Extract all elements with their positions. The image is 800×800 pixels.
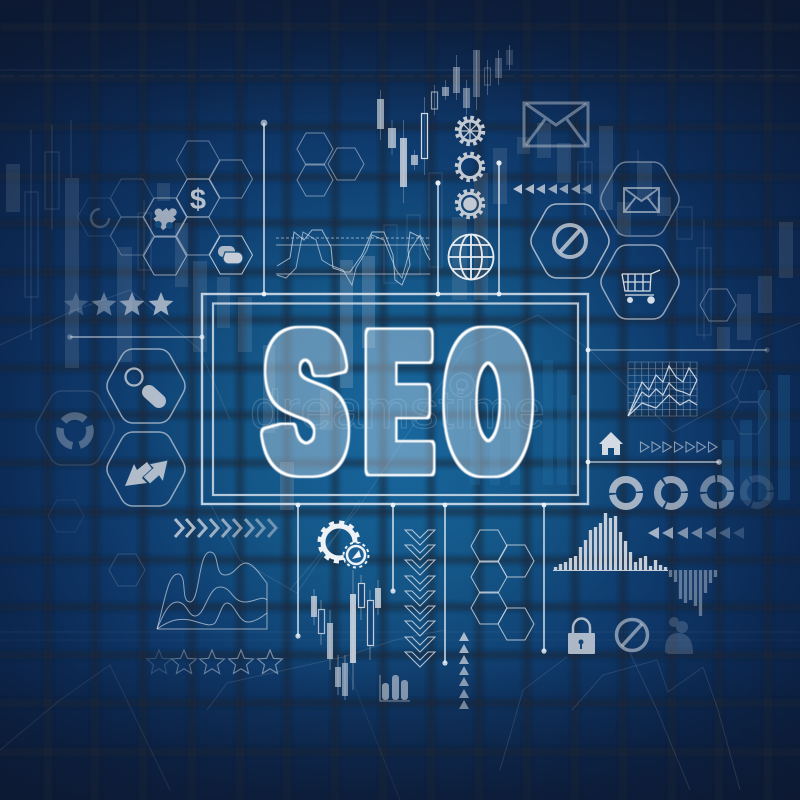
icon: gear three xyxy=(457,191,483,217)
faint trend lines xyxy=(0,290,800,800)
faint horizontal bands xyxy=(0,70,800,640)
hexagon: shopping cart xyxy=(601,245,679,319)
icon: people xyxy=(665,617,693,654)
chevron row xyxy=(175,519,276,537)
icon: top envelope xyxy=(524,103,588,146)
histogram xyxy=(553,513,716,616)
area line chart xyxy=(157,552,267,629)
hexagons top center xyxy=(297,133,364,196)
faint hexagons right xyxy=(700,289,767,434)
gears column xyxy=(457,118,483,217)
SEO title: O xyxy=(448,294,528,512)
hexagon: recycle xyxy=(36,391,114,465)
double chevrons down xyxy=(405,530,435,667)
triangles up column xyxy=(459,632,469,709)
SEO title: E xyxy=(368,293,429,511)
left pointing arrows right xyxy=(648,527,744,539)
right pointing outlined triangles xyxy=(640,442,717,452)
top stars xyxy=(64,292,173,316)
hexagon: envelope xyxy=(601,162,679,236)
faint background hollow candles xyxy=(25,120,711,340)
hexagon: exchange arrows xyxy=(107,432,185,506)
candlestick chart bottom xyxy=(311,570,381,700)
hexagons bottom center xyxy=(471,530,534,640)
icon: house xyxy=(599,432,623,455)
hexagon: forbidden xyxy=(531,204,609,278)
icon: puzzle piece xyxy=(147,200,183,236)
watermark: dreamstime xyxy=(250,380,545,440)
candlestick chart top xyxy=(377,45,513,203)
SEO title: S xyxy=(267,292,344,510)
circular ring icons xyxy=(612,478,770,506)
icon: lock xyxy=(568,618,595,654)
faint hexagons left xyxy=(48,500,145,586)
hexagon: magnifier xyxy=(107,349,185,423)
connector lines xyxy=(67,120,770,666)
icon: gear one xyxy=(457,118,483,144)
faint background candlestick chart xyxy=(6,123,793,510)
hexagon cluster upper left xyxy=(78,141,252,275)
icon: small bar chart xyxy=(380,675,410,701)
faint bar chart right xyxy=(470,360,790,500)
icon: gear pair xyxy=(320,523,368,568)
icon: dollar: $ xyxy=(190,184,206,216)
icon: ring xyxy=(91,209,109,227)
left pointing arrows top right xyxy=(513,184,591,194)
icon: forbidden xyxy=(616,620,648,650)
line chart right xyxy=(628,362,697,416)
icon: globe xyxy=(448,234,494,280)
icon: gear two xyxy=(457,154,483,180)
icon: chat bubbles xyxy=(218,246,243,264)
SEO title xyxy=(267,292,528,512)
bottom outlined stars xyxy=(147,650,282,674)
line chart top center xyxy=(276,230,430,285)
central frame xyxy=(202,294,588,504)
